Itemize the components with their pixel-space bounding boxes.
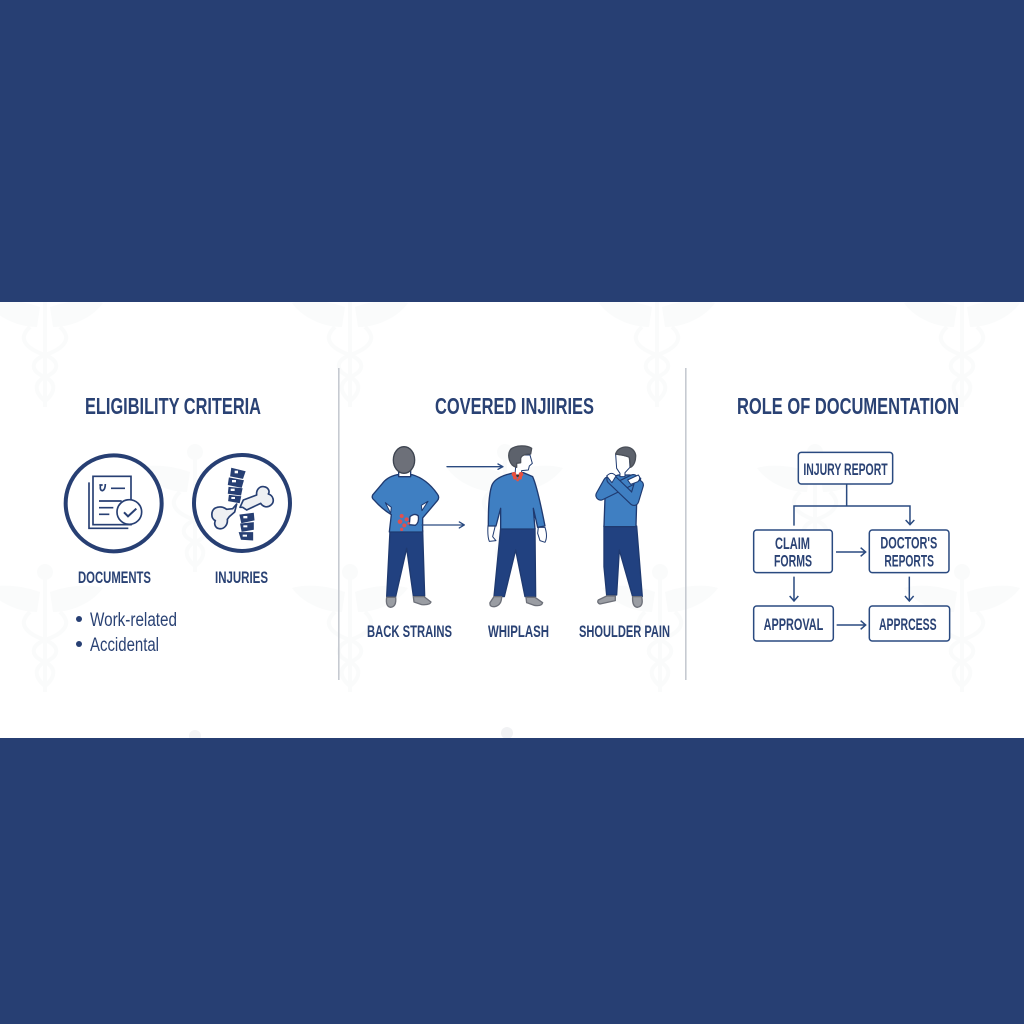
bone left half — [212, 504, 237, 529]
box: claim forms: CLAIM — [775, 535, 810, 553]
label: injuries: INJURIES — [215, 569, 268, 587]
box: doctor's reports — [869, 530, 949, 573]
box: doctor's reports: DOCTOR'S — [880, 534, 937, 552]
white center panel — [0, 302, 1024, 738]
flowchart — [754, 452, 950, 641]
column divider right — [685, 368, 687, 680]
figures and arrows — [372, 446, 642, 607]
label: shoulder pain: SHOULDER PAIN — [579, 623, 670, 641]
label: whiplash: WHIPLASH — [488, 623, 549, 641]
box: apprcess: APPRCESS — [879, 616, 937, 634]
figure: shoulder pain — [598, 447, 642, 607]
box: apprcess — [869, 606, 950, 641]
box: injury report — [798, 452, 893, 484]
label: back strains: BACK STRAINS — [367, 623, 452, 641]
bone right half — [240, 487, 273, 510]
top navy band — [0, 0, 1024, 302]
panel: covered injuries — [367, 393, 670, 641]
bullet list: Work-related — [90, 610, 177, 631]
icon: injuries bone and spine — [194, 455, 290, 551]
box: claim forms — [754, 530, 832, 573]
heading: eligibility criteria: ELIGIBILITY CRITERIA — [85, 393, 261, 419]
heading: covered injuries: COVERED INJIIRIES — [435, 393, 594, 419]
bottom navy band — [0, 738, 1024, 1024]
arrow: bottom — [422, 522, 464, 528]
figure: back strains — [372, 447, 439, 607]
caduceus watermark pattern — [0, 281, 1020, 742]
pain mark: neck — [512, 472, 523, 481]
figure: whiplash — [488, 446, 546, 607]
box: approval: APPROVAL — [764, 616, 823, 634]
box: claim forms: FORMS — [774, 553, 812, 571]
bullet list — [76, 610, 177, 656]
bullet list: Accidental — [90, 635, 159, 656]
arrow: top — [447, 464, 503, 469]
box: doctor's reports: REPORTS — [884, 553, 934, 571]
panel: role of documentation — [737, 393, 959, 641]
panel: eligibility criteria — [66, 393, 290, 656]
pain mark: lower back — [398, 514, 410, 531]
box: approval — [754, 606, 833, 641]
column divider left — [338, 368, 340, 680]
label: documents: DOCUMENTS — [78, 569, 151, 587]
flow arrows — [790, 484, 914, 629]
icon: documents — [66, 455, 162, 551]
box: injury report: INJURY REPORT — [803, 461, 888, 479]
